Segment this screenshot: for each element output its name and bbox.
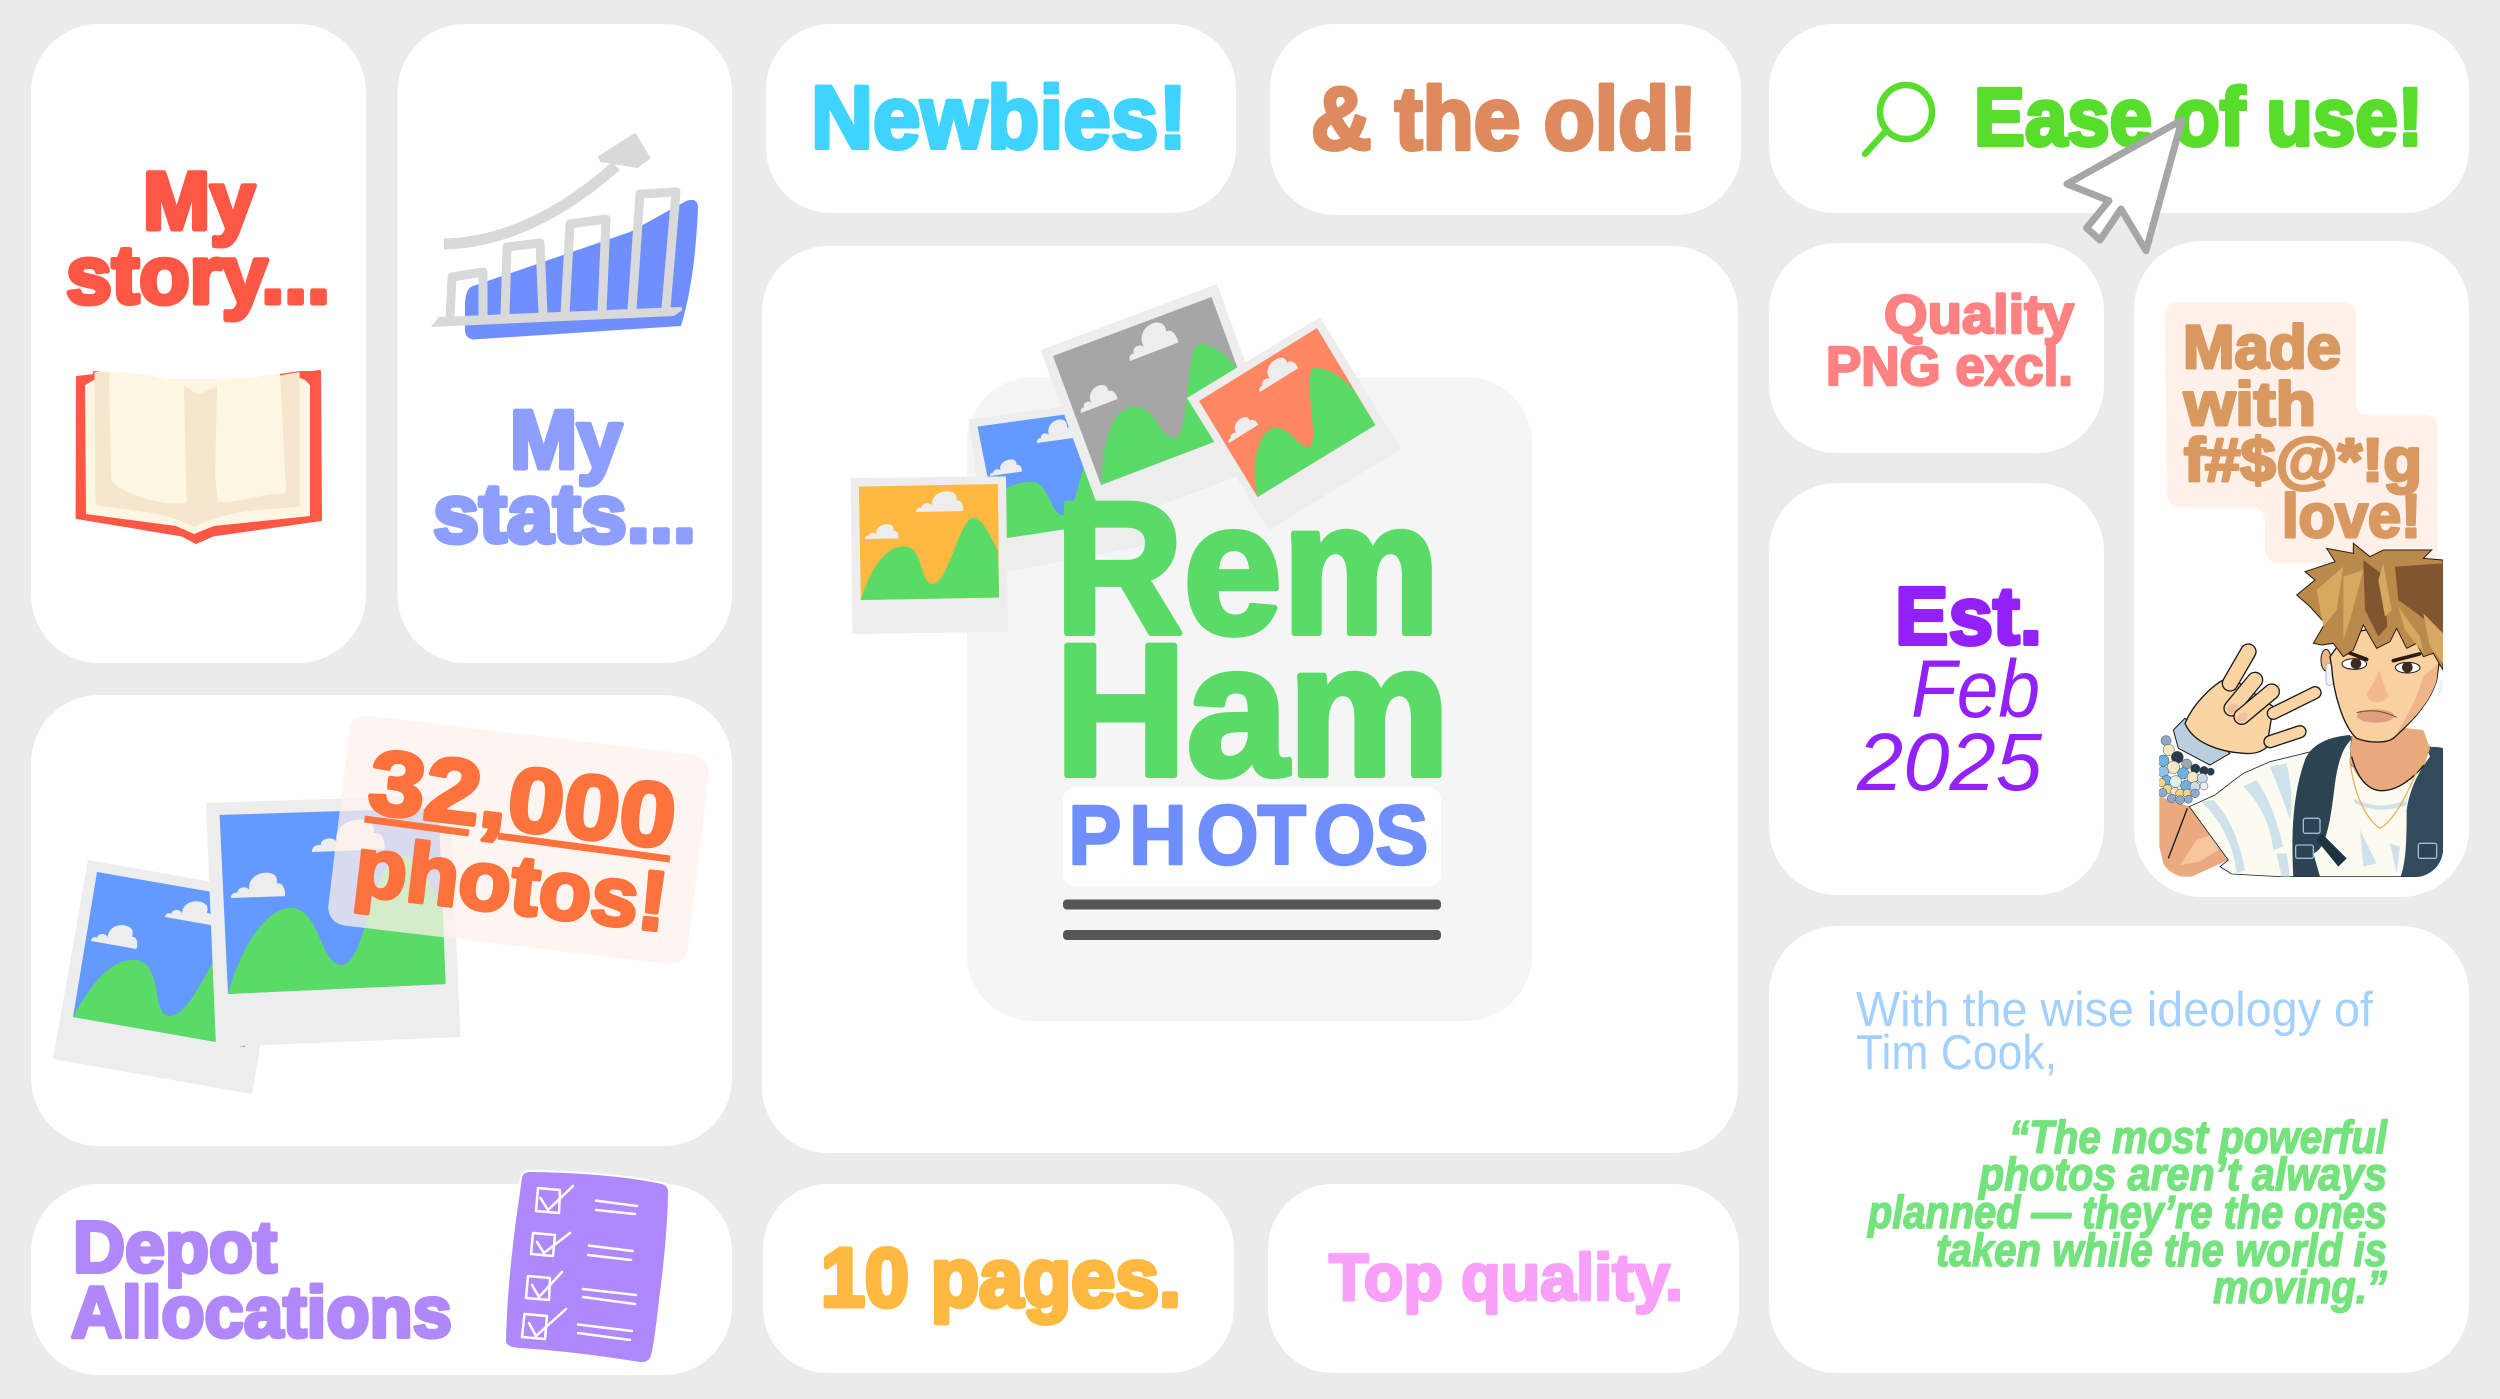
- quote text: photos aren’t always: [1977, 1148, 2387, 1200]
- heading: Made with love: Made: [2183, 313, 2341, 381]
- panel: my story: [31, 24, 366, 663]
- icon: checklist: [505, 1171, 669, 1363]
- heading: Quality PNG excl: PNG excl.: [1826, 335, 2073, 397]
- callout: translucent tag: [326, 714, 711, 966]
- logo label: PHOTOS: PHOTOS: [1068, 789, 1428, 882]
- quote text: moving.”: [2213, 1261, 2387, 1313]
- heading: My stats: [433, 393, 696, 560]
- heading: My story: [66, 156, 330, 321]
- icon: blue photo: [968, 398, 1150, 575]
- panel: made with love: [2134, 241, 2469, 897]
- quote text: taken while the world is: [1936, 1224, 2387, 1276]
- icon: yellow photo: [851, 476, 1008, 634]
- icon: cursor arrow: [2067, 120, 2182, 251]
- logo wordmark: Rem Ham: [1055, 463, 1450, 815]
- card: [763, 1184, 1234, 1373]
- heading: Quality PNG excl: [1826, 283, 2074, 397]
- card: [31, 1184, 732, 1375]
- intro text: [1856, 983, 2373, 1080]
- quote text: [1866, 1111, 2388, 1313]
- tag background: [2165, 302, 2438, 563]
- logo wordmark: Rem Ham: Ham: [1055, 605, 1450, 815]
- heading: Made with love: f#$@*!g: [2184, 426, 2422, 494]
- panel: logo: [762, 246, 1738, 1153]
- card: [1769, 483, 2104, 895]
- heading: Est. Feb 2025: Est.: [1895, 571, 2042, 662]
- icon: open book: [77, 371, 321, 543]
- card: [1769, 926, 2469, 1373]
- logo backing: [967, 377, 1532, 1021]
- panel: 10 pages: [763, 1184, 1234, 1373]
- card: [1769, 24, 2469, 213]
- heading: Est. Feb 2025: [1856, 571, 2042, 808]
- panel: depot allocations: [31, 1171, 732, 1375]
- quote text: “The most powerful: [2009, 1111, 2388, 1163]
- card: [1270, 24, 1741, 215]
- card: [398, 24, 732, 663]
- intro text: Tim Cook,: [1856, 1026, 2057, 1080]
- quote text: planned — they’re the ones: [1866, 1186, 2387, 1238]
- icon: front photo: [206, 795, 460, 1047]
- heading: Newbies: Newbies!: [811, 67, 1187, 167]
- panel: ease of use: [1769, 24, 2469, 251]
- heading: Depot Allocations: [71, 1208, 452, 1353]
- card: [1268, 1184, 1739, 1373]
- heading: My stats: stats...: [433, 467, 696, 560]
- panel: Newbies: [766, 24, 1236, 213]
- heading: Depot Allocations: Allocations: [71, 1273, 452, 1353]
- logo wordmark: Rem Ham: Rem: [1055, 463, 1440, 673]
- icon: growth chart: [431, 134, 698, 340]
- card: [1769, 243, 2104, 453]
- heading: Top quality: Top quality.: [1329, 1240, 1683, 1314]
- panel: my stats: [398, 24, 732, 663]
- heading: Made with love: love!: [2282, 482, 2421, 550]
- heading: Est. Feb 2025: 2025: [1856, 717, 2042, 808]
- card: [31, 695, 732, 1146]
- heading: 10 pages: 10 pages.: [821, 1231, 1181, 1324]
- panel: top quality: [1268, 1184, 1739, 1373]
- icon: grey photo: [1041, 284, 1281, 526]
- card: [31, 24, 366, 663]
- panel: Tim Cook quote: [1769, 926, 2469, 1373]
- intro text: With the wise ideology of: [1856, 983, 2373, 1037]
- heading: My stats: My: [510, 393, 622, 486]
- panel: established: [1769, 483, 2104, 895]
- heading: Made with love: [2183, 313, 2422, 550]
- heading: My story: My: [143, 156, 255, 247]
- panel: quality PNG: [1769, 243, 2104, 453]
- illustration: boy with rock sign: [2158, 543, 2444, 877]
- panel: the old: [1270, 24, 1741, 215]
- heading: Made with love: with: [2183, 370, 2316, 438]
- stat: 32,000 photos: 32,000: [364, 732, 681, 868]
- heading: Ease of use: Ease of use!: [1974, 72, 2423, 163]
- stat: 32,000 photos: photos!: [350, 819, 673, 949]
- heading: Est. Feb 2025: Feb: [1911, 644, 2040, 735]
- icon: orange photo: [1187, 317, 1401, 530]
- heading: Depot Allocations: Depot: [73, 1208, 277, 1288]
- card: [766, 24, 1236, 213]
- panel: 32,000 photos: [31, 695, 732, 1146]
- icon: back photo: [53, 860, 287, 1094]
- card: [762, 246, 1738, 1153]
- card: [2134, 241, 2469, 897]
- stat: 32,000 photos: [350, 732, 681, 949]
- heading: My story: story...: [66, 230, 330, 321]
- heading: Quality PNG excl: Quality: [1884, 283, 2074, 345]
- heading: & the old: & the old!: [1311, 68, 1697, 168]
- icon: magnifier: [1865, 85, 1932, 154]
